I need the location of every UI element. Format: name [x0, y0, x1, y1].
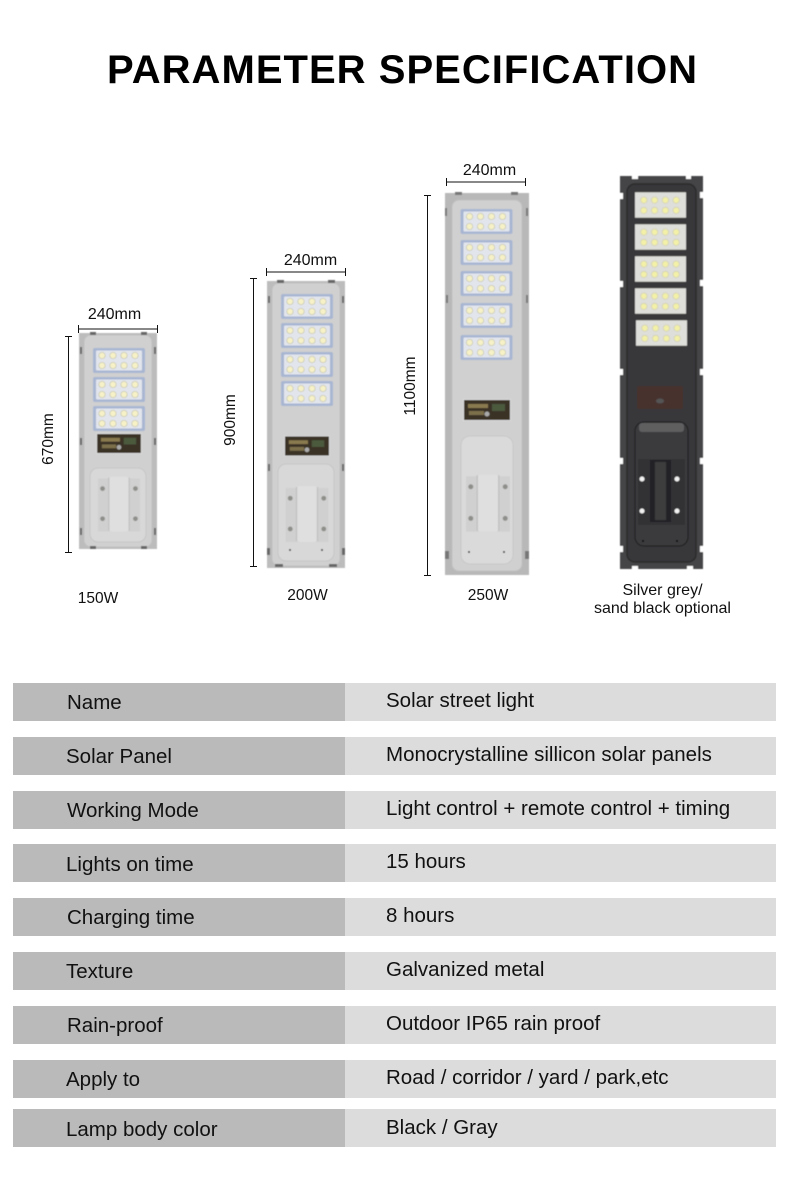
dimension: 200W width [266, 252, 346, 276]
dimension: 150W width [78, 306, 158, 333]
row: rain-proof [13, 1006, 776, 1044]
row: lamp body color: Lamp body color [66, 1118, 218, 1141]
row: name: Name [67, 691, 122, 714]
row: apply to: Apply to [66, 1068, 140, 1091]
row: lamp body color [13, 1109, 776, 1147]
dimension: 250W width [446, 162, 526, 186]
row: lights on time [13, 844, 776, 882]
row: rain-proof: Rain-proof [67, 1014, 163, 1037]
row: apply to [13, 1060, 776, 1098]
lamp: 200W [267, 280, 345, 568]
label: colour option: Silver grey/ [622, 582, 703, 599]
row: apply to: Road / corridor / yard / park,etc [386, 1066, 669, 1089]
row: working mode [13, 791, 776, 829]
row: texture [13, 952, 776, 990]
row: solar panel: Monocrystalline sillicon solar panels [386, 743, 712, 766]
dimension: 200W width: 240mm [284, 252, 337, 269]
row: texture: Galvanized metal [386, 958, 544, 981]
row: name [13, 683, 776, 721]
dimension: 200W height [222, 278, 257, 566]
row: working mode: Working Mode [67, 799, 199, 822]
spec table [13, 683, 776, 1147]
dimension: 150W height [40, 336, 72, 552]
dimension: 250W height: 1100mm [402, 356, 419, 416]
dimension: 150W width: 240mm [88, 306, 141, 323]
row: lamp body color: Black / Gray [386, 1116, 498, 1139]
dimension: 150W height: 670mm [40, 413, 57, 465]
row: lights on time: Lights on time [66, 853, 194, 876]
row: charging time [13, 898, 776, 936]
row: name: Solar street light [386, 689, 534, 712]
row: lights on time: 15 hours [386, 850, 466, 873]
lamp: black option [620, 176, 703, 569]
dimension: 250W height [402, 196, 431, 576]
row: solar panel: Solar Panel [66, 745, 172, 768]
label: 250W: 250W [468, 587, 509, 604]
title: PARAMETER SPECIFICATION [107, 48, 697, 92]
row: rain-proof: Outdoor IP65 rain proof [386, 1012, 601, 1035]
dimension: 250W width: 240mm [463, 162, 516, 179]
label: 200W: 200W [287, 587, 328, 604]
row: working mode: Light control + remote control + timing [386, 797, 730, 820]
lamp: 250W [445, 192, 529, 575]
row: charging time: Charging time [67, 906, 195, 929]
row: texture: Texture [66, 960, 133, 983]
label: 150W: 150W [78, 590, 119, 607]
label: colour option: sand black optional [594, 600, 731, 617]
row: charging time: 8 hours [386, 904, 454, 927]
lamp: 150W [79, 332, 157, 549]
row: solar panel [13, 737, 776, 775]
label: colour option [594, 582, 731, 617]
dimension: 200W height: 900mm [222, 394, 239, 446]
